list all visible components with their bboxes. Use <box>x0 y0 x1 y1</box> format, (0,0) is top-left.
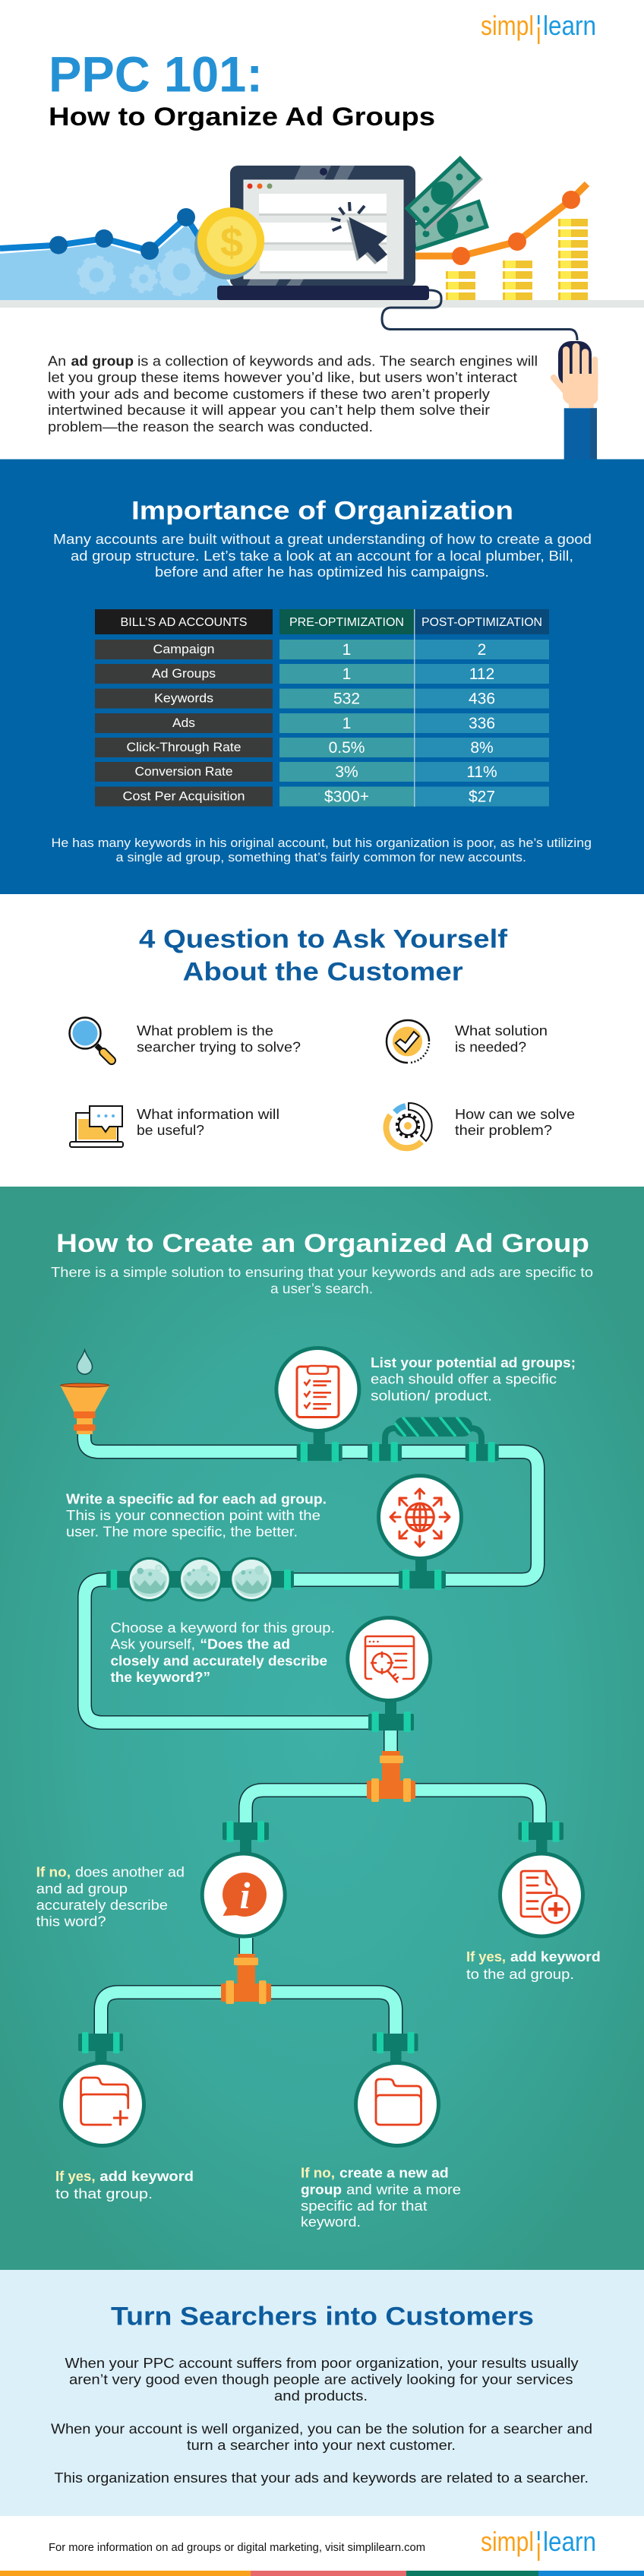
table: Bill's ad accounts <box>95 609 549 807</box>
icon: clipboard <box>276 1348 359 1431</box>
text block: intro: with your ads and become customers if these two aren’t properly <box>47 387 490 402</box>
table rows: Cost Per Acquisition <box>123 790 245 804</box>
text block: if no, another ad: does another ad <box>75 1865 185 1880</box>
icon: gauge 2 <box>178 1557 223 1601</box>
text block: if no, another ad: accurately describe <box>36 1898 168 1913</box>
icon: document with plus node <box>500 1854 583 1936</box>
connector: stem and coupling <box>368 1700 414 1732</box>
icon: check badge <box>387 1020 429 1063</box>
text block: table introduction: before and after he has optimized his campaigns. <box>155 564 489 580</box>
text block: if no, create a new ad group <box>301 2166 461 2230</box>
table rows: 436 <box>469 690 495 708</box>
table rows: 8% <box>470 739 494 757</box>
text block: if yes, add keyword to that group: add keyword <box>99 2169 194 2184</box>
text block: list your potential ad groups: each should offer a specific <box>371 1372 557 1387</box>
text: question 2: What solution <box>455 1023 548 1038</box>
icon: orange funnel <box>61 1383 109 1434</box>
heading: How to Create an Organized Ad Group <box>56 1229 589 1258</box>
icon: magnifying glass <box>70 1018 112 1060</box>
table rows: Conversion Rate <box>135 765 232 779</box>
text block: if yes, add keyword to that group: If yes, <box>55 2169 96 2184</box>
text: question 2: is needed? <box>455 1039 526 1054</box>
logo: simplilearn header: learn <box>543 10 596 41</box>
text block: if no, another ad: If no, <box>36 1865 71 1880</box>
text: question 3: What information will <box>137 1107 279 1122</box>
logo: simplilearn header: simpl <box>481 10 534 41</box>
text block: intro <box>47 354 538 435</box>
text block: closing paragraphs <box>51 2356 592 2486</box>
title: How to Organize Ad Groups <box>49 103 435 131</box>
text block: write a specific ad: user. The more specific, the better. <box>66 1525 298 1540</box>
text: question 1: What problem is the <box>137 1023 273 1038</box>
text block: if no, create a new ad group: group <box>301 2182 342 2197</box>
ground strip <box>0 300 644 308</box>
connector: gauge coupling bar <box>106 1569 294 1590</box>
text block: if no, create a new ad group: create a new ad <box>339 2166 449 2181</box>
icon: gauge 1 <box>127 1557 172 1601</box>
icon: laptop <box>217 166 429 300</box>
connector: stem and coupling <box>297 1428 343 1462</box>
icon: globe with arrows <box>378 1475 462 1559</box>
panel: turn searchers into customers <box>0 2270 644 2516</box>
text block: table introduction <box>53 532 592 580</box>
text block: intro: An <box>48 354 66 369</box>
table rows: Campaign <box>153 643 214 656</box>
table rows: Keywords <box>154 691 213 705</box>
icon: front dollar bill <box>405 156 483 232</box>
text block: if yes, add keyword to that group: to that group. <box>55 2186 153 2201</box>
chart: orange growth line and coin stacks <box>410 184 588 300</box>
icon: gauge 3 <box>229 1557 274 1601</box>
text: question 2 <box>455 1023 548 1054</box>
table rows: 1 <box>343 715 351 732</box>
icon: info speech bubble node: i <box>240 1874 251 1917</box>
text block: if yes, add keyword to the ad group: to the ad group. <box>466 1967 574 1982</box>
table rows: Ad Groups <box>152 667 216 681</box>
table rows: 0.5% <box>329 739 365 757</box>
footer colour bar <box>0 2571 644 2576</box>
text block: closing paragraphs: When your PPC account suffers from poor organization, your results usually <box>65 2356 578 2371</box>
table rows: 112 <box>469 665 494 683</box>
connector: orange T junction 1 <box>367 1751 415 1802</box>
table header <box>95 609 549 634</box>
text block: if no, another ad: and ad group <box>36 1881 128 1896</box>
icon: rear dollar bill <box>410 199 489 251</box>
icon: sleeve <box>564 408 597 460</box>
heading: About the Customer <box>183 958 463 987</box>
step: keyword node <box>348 1618 431 1732</box>
table rows: 1 <box>343 641 351 659</box>
icon: gear and donut chart <box>387 1103 432 1148</box>
logo: simplilearn footer: learn <box>543 2526 596 2557</box>
text block: if no, another ad <box>36 1865 185 1930</box>
text block: if no, create a new ad group: If no, <box>301 2166 335 2181</box>
text block: write a specific ad <box>66 1492 327 1540</box>
connector: orange T junction 2 <box>221 1954 271 2004</box>
text: question 4 <box>455 1107 575 1138</box>
text block: table introduction: ad group structure. Let’s take a look at an account for a local plumber, Bill, <box>71 548 573 564</box>
chart: blue area with gears <box>0 208 230 300</box>
text block: if yes, add keyword to the ad group: If yes, <box>466 1949 506 1964</box>
text block: list your potential ad groups: List your potential ad groups; <box>371 1355 576 1370</box>
text block: closing paragraphs: When your account is well organized, you can be the solution for a searcher and <box>51 2421 592 2436</box>
text block: closing paragraphs: turn a searcher into your next customer. <box>187 2438 456 2453</box>
footer: call to action: For more information on ad groups or digital marketing, visit simplilearn.com <box>49 2541 425 2554</box>
table rows: 2 <box>478 641 486 659</box>
icon: hand on mouse <box>554 341 598 408</box>
table rows: 532 <box>333 690 360 708</box>
step: list ad groups node <box>276 1348 359 1462</box>
text block: if yes, add keyword to the ad group <box>466 1949 601 1982</box>
icon: laptop with speech bubble <box>70 1106 123 1147</box>
text block: choose a keyword: Ask yourself, <box>111 1637 195 1652</box>
gauges: three bubble gauges on pipe <box>106 1557 294 1601</box>
text block: closing paragraphs: This organization ensures that your ads and keywords are related to a searcher. <box>54 2470 589 2486</box>
text block: choose a keyword <box>111 1620 335 1685</box>
text: question 1 <box>137 1023 301 1054</box>
table header: PRE-OPTIMIZATION <box>289 616 404 629</box>
heading: Importance of Organization <box>131 497 513 526</box>
table rows: $300+ <box>324 789 369 805</box>
connector: lower right coupling <box>372 2032 418 2063</box>
icon: folder node <box>355 2063 439 2145</box>
pipes: mint flow pipeline <box>84 1434 539 2034</box>
text block: choose a keyword: closely and accurately describe <box>111 1653 327 1668</box>
table header: BILL’S AD ACCOUNTS <box>120 616 248 629</box>
text block: intro: problem—the reason the search was conducted. <box>48 419 373 435</box>
heading: Turn Searchers into Customers <box>111 2303 534 2331</box>
table rows: Ads <box>172 716 195 730</box>
table rows: 1 <box>343 665 351 683</box>
text block: if yes, add keyword to that group <box>55 2169 194 2201</box>
heading: 4 Question to Ask Yourself <box>139 925 508 954</box>
logo: simplilearn header <box>481 10 596 44</box>
text: question 3: be useful? <box>137 1123 204 1138</box>
icon: water drop <box>77 1350 93 1374</box>
text block: section introduction: There is a simple solution to ensuring that your keywords and ads are specific to <box>51 1265 593 1280</box>
text block: if no, create a new ad group: and write a more <box>346 2182 461 2197</box>
panel: how to create an organized ad group <box>0 1187 644 2270</box>
text: question 1: searcher trying to solve? <box>137 1039 301 1054</box>
text block: table introduction: Many accounts are built without a great understanding of how to create a good <box>53 532 592 547</box>
text: question 3 <box>137 1107 279 1138</box>
hero illustration <box>0 156 644 460</box>
text block: intro: is a collection of keywords and ads. The search engines will <box>137 354 538 369</box>
panel: importance of organization <box>0 459 644 894</box>
text block: intro: let you group these items however you’d like, but users won’t interact <box>48 370 517 385</box>
logo: simplilearn footer <box>481 2526 596 2561</box>
icon: gold dollar coin: $ <box>220 220 243 265</box>
text block: choose a keyword: the keyword?” <box>111 1670 210 1685</box>
text block: list your potential ad groups: solution/ product. <box>371 1388 492 1403</box>
connector: stem and coupling <box>399 1557 446 1590</box>
text block: table note: He has many keywords in his original account, but his organization is poor, as he’s utilizing <box>52 836 592 850</box>
text block: section introduction: a user’s search. <box>270 1282 373 1297</box>
icon: striped hose with couplings <box>368 1417 499 1462</box>
text block: table note <box>52 836 592 864</box>
table rows: 11% <box>466 763 497 781</box>
text block: write a specific ad: Write a specific ad for each ad group. <box>66 1492 327 1507</box>
table rows: 3% <box>335 763 358 781</box>
step: connection node <box>378 1475 462 1590</box>
icon: folder with plus node <box>61 2063 144 2145</box>
panel: 4 questions <box>70 925 575 1148</box>
connector: left branch coupling <box>223 1821 269 1855</box>
title: PPC 101: <box>49 46 263 102</box>
text block: closing paragraphs: aren’t very good even though people are actively looking for your services <box>69 2372 573 2388</box>
text block: if no, another ad: this word? <box>36 1914 106 1930</box>
icon: browser window with target and key <box>348 1618 431 1700</box>
text: question 4: How can we solve <box>455 1107 575 1122</box>
title <box>49 46 435 131</box>
text: question 4: their problem? <box>455 1123 552 1138</box>
text block: closing paragraphs: and products. <box>274 2388 368 2404</box>
icon: mouse pointer with click marks <box>331 202 387 264</box>
connector: lower left coupling <box>78 2032 123 2063</box>
text block: list your potential ad groups <box>371 1355 576 1403</box>
text block: if no, create a new ad group: keyword. <box>301 2214 361 2230</box>
table header: POST-OPTIMIZATION <box>421 616 542 629</box>
logo: simplilearn footer: simpl <box>481 2526 534 2557</box>
table rows <box>95 640 549 807</box>
table rows: Click-Through Rate <box>126 741 242 754</box>
connector: right branch coupling <box>518 1821 564 1855</box>
icon: mouse cable <box>382 290 577 340</box>
text block: choose a keyword: “Does the ad <box>200 1637 290 1652</box>
table rows: $27 <box>469 789 495 805</box>
icon: info speech bubble node <box>202 1854 285 1936</box>
text block: intro: ad group <box>71 354 134 369</box>
text block: write a specific ad: This is your connection point with the <box>66 1508 320 1523</box>
text block: if yes, add keyword to the ad group: add keyword <box>510 1949 601 1964</box>
text block: table note: a single ad group, something that’s fairly common for new accounts. <box>115 851 526 864</box>
heading <box>139 925 508 987</box>
text block: if no, create a new ad group: specific ad for that <box>301 2198 427 2214</box>
text block: intro: intertwined because it will appear you can’t help them solve their <box>48 403 490 418</box>
text block: choose a keyword: Choose a keyword for this group. <box>111 1620 335 1636</box>
text block: section introduction <box>51 1265 593 1297</box>
icon: gold dollar coin <box>194 207 264 280</box>
table rows: 336 <box>469 715 495 732</box>
